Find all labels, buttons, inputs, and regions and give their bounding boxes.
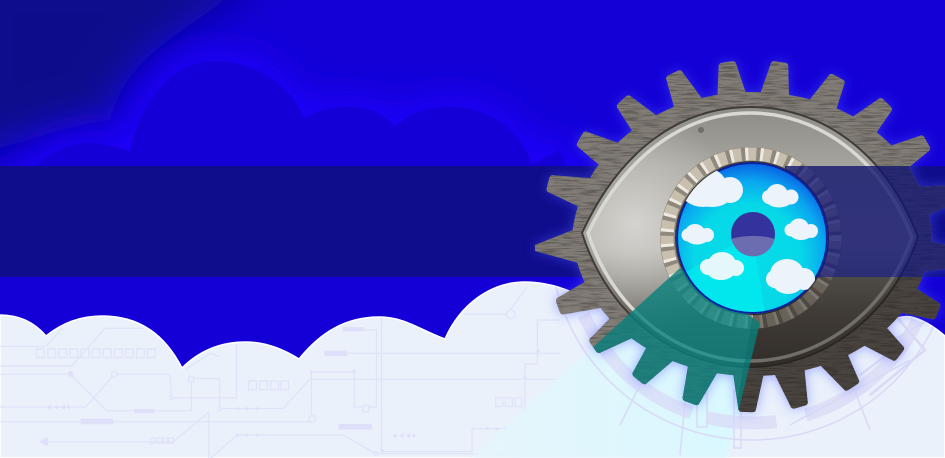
light cyan wedge over cloud: [474, 340, 738, 458]
gear halo: [533, 57, 945, 416]
iris: [676, 162, 828, 314]
iris cloud lower left: [700, 252, 744, 280]
serrated ring around iris: [660, 147, 842, 329]
teal wedge: [593, 268, 760, 410]
pupil: [731, 212, 775, 256]
background cloud silhouette with glow: [0, 61, 575, 190]
dark top-left corner: [0, 0, 270, 160]
iris cloud top right: [762, 184, 798, 208]
technical radial rings: [555, 286, 934, 455]
dark overlays on gear: [593, 166, 945, 412]
iris cloud top left: [686, 170, 743, 207]
dark horizontal band: [0, 166, 945, 277]
circuit lines: [0, 286, 934, 458]
band shade on gear: [785, 166, 945, 277]
iris cloud left: [682, 224, 714, 244]
gear eye plate: [582, 107, 918, 367]
iris cloud lower right: [766, 259, 815, 294]
lower right shade: [738, 277, 940, 412]
iris cloud right: [784, 218, 818, 240]
gear body with teeth: [533, 57, 945, 416]
foreground cloud: [0, 281, 945, 458]
